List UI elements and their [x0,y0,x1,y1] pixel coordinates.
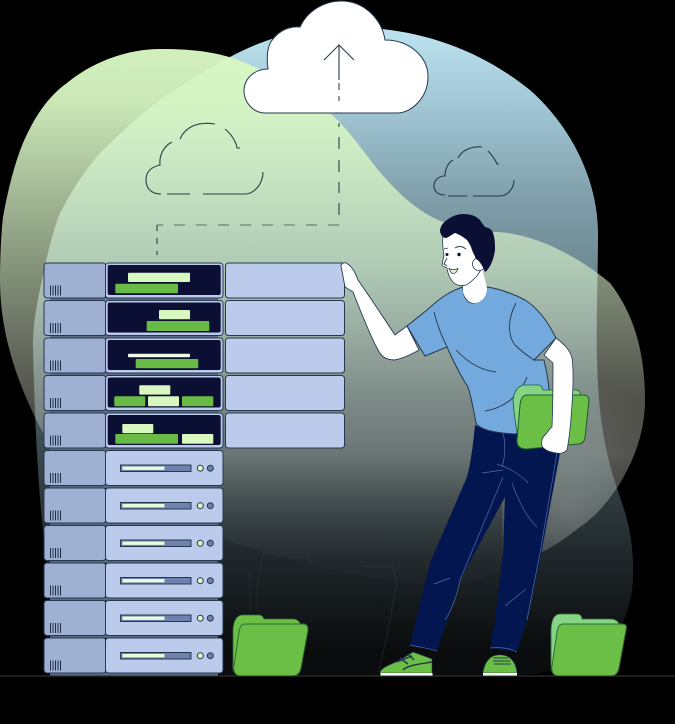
blob: green highlight [500,283,645,570]
server row 3 [44,338,223,375]
screens [108,265,221,445]
server row 10 [44,600,223,638]
cloud: upload [244,1,428,113]
folder: bottom right [551,614,626,676]
blob: green [0,49,645,584]
face [442,228,486,286]
screen bars: green [114,284,213,444]
hair [440,214,495,272]
ground line [0,676,675,677]
server row 5 [44,413,223,450]
server row 11 [44,638,223,675]
cloud: dashed left [146,123,263,194]
neck and head [440,214,495,303]
arrow: upload [324,45,354,101]
shoe: right [483,655,517,676]
server rack [44,263,344,675]
arm: holding folder [542,338,573,453]
server row 9 [44,563,223,600]
folder: bottom left [233,615,308,676]
server row 1 [44,263,223,300]
pants [410,425,560,652]
server row 4 [44,376,223,413]
ghost folder outlines [250,553,397,672]
dashed connector [157,123,339,255]
server row 6 [44,450,223,488]
screen bars: light [122,273,213,444]
server row 2 [44,300,223,338]
server row 8 [44,526,223,563]
blob: blue [33,27,633,676]
shoe: left [380,652,432,676]
neck [463,268,487,303]
folder: held [513,385,589,449]
side panels [226,263,344,448]
arm: reaching [341,263,419,360]
server row 7 [44,488,223,525]
shirt [407,287,556,434]
cloud: dashed right [434,147,514,196]
person [341,214,589,676]
